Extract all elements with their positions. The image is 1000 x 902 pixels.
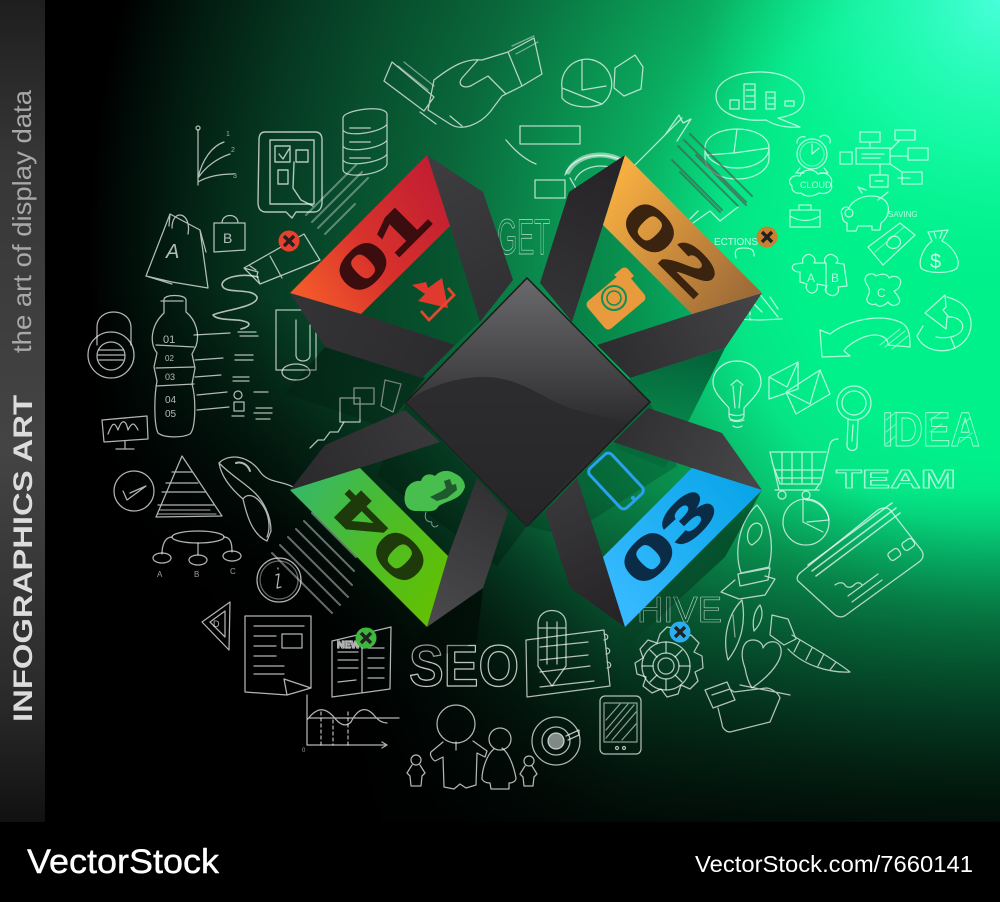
doodle: family figures <box>407 705 537 789</box>
doodle: necktie <box>770 615 850 672</box>
doodle: briefcase <box>790 205 820 227</box>
doodle: credit card <box>797 503 923 617</box>
doodle: alarm clock <box>796 135 830 173</box>
doodle: line graph: 0 <box>302 748 306 754</box>
doodle: shopping bag B <box>214 216 245 252</box>
doodle: shopping bag A <box>146 214 208 288</box>
doodle: letter C puzzle: C <box>877 286 886 300</box>
doodle: coffee cup <box>532 717 580 765</box>
doodle: curved arrow <box>820 318 910 357</box>
flap: upper dark fold <box>540 155 625 322</box>
doodle: handshake <box>384 36 542 127</box>
doodle: bottle with list: 02 <box>165 354 174 363</box>
doodle: TEAM lettering: TEAM <box>836 464 956 494</box>
icon: download into tray <box>412 278 454 320</box>
icon: smartphone <box>587 451 645 511</box>
doodle: smartphone <box>600 696 641 754</box>
doodle: squiggle <box>213 275 258 329</box>
doodle: org chart: B <box>194 570 199 579</box>
doodle: IDEA lettering: IDEA <box>882 404 980 457</box>
doodle: branching curves: 1 <box>226 131 230 138</box>
doodle: document <box>245 616 311 695</box>
doodle: chart under orange panel <box>705 292 782 320</box>
doodle: banknote <box>868 223 915 265</box>
doodle: small pie <box>783 499 829 545</box>
doodle: envelopes <box>769 362 830 414</box>
doodle: pencil <box>244 234 320 284</box>
doodle: bottle with list <box>152 296 272 437</box>
doodle: target arrow <box>506 115 691 198</box>
doodle: shopping bag A: A <box>165 241 179 263</box>
doodle: org chart: C <box>230 567 236 576</box>
badge: orange x <box>756 226 778 248</box>
panel: 03 <box>545 408 762 627</box>
footer url: VectorStock.com/7660141 <box>695 851 973 877</box>
flap: upper dark fold <box>427 155 513 322</box>
number 01: 01 <box>323 188 442 307</box>
doodle: piggy bank: SAVING <box>888 210 918 219</box>
doodle: letter C puzzle <box>865 274 901 306</box>
side strip <box>0 0 45 822</box>
doodle: mouse <box>219 457 293 541</box>
flap: left dark fold <box>290 293 455 378</box>
doodle: branching curves: 2 <box>231 147 235 154</box>
number 04: 04 <box>321 476 441 596</box>
flap: right dark fold <box>613 408 762 490</box>
badge: green x <box>356 628 376 648</box>
number 02: 02 <box>608 188 730 310</box>
doodle: tablet with hand <box>258 132 322 218</box>
band: blue label <box>603 468 762 627</box>
icon: camera <box>585 268 647 332</box>
inner shaded triangles <box>360 225 692 557</box>
doodle: triangle sign: D <box>213 619 220 629</box>
doodle: branching curves <box>196 126 237 185</box>
doodle: light bulb <box>713 361 761 428</box>
doodle: directions text and network <box>690 207 758 258</box>
panel: 01 <box>290 155 513 378</box>
doodle: puzzle pieces <box>792 254 847 296</box>
doodle: news page: NEWS <box>337 640 367 651</box>
badge: blue x <box>670 622 690 642</box>
doodle: shopping bag B: B <box>223 230 232 246</box>
footer bar <box>0 822 1000 902</box>
doodle: org chart <box>153 531 241 579</box>
doodle: folder with pen <box>705 682 790 732</box>
panel: 04 <box>290 410 508 627</box>
doodle: bottle with list: 01 <box>163 334 175 346</box>
doodle: directions text and network: ECTIONS <box>714 237 758 248</box>
doodle: presentation board <box>102 416 148 449</box>
panel: 02 <box>540 155 762 378</box>
doodle: puzzle pieces: A <box>807 271 815 285</box>
doodle: paperclip sheet <box>276 310 316 380</box>
doodle sketches <box>88 36 980 789</box>
doodle: money bag: $ <box>930 251 941 273</box>
doodle: notebook with pencil <box>526 610 611 697</box>
doodle: shopping cart <box>770 439 838 499</box>
doodle: diagonal text lines <box>272 505 356 613</box>
doodle: pie chart <box>562 55 643 107</box>
number 03: 03 <box>608 477 730 599</box>
long shadows behind the central figure <box>285 347 762 677</box>
doodle: bottle with list: 04 <box>165 395 177 406</box>
doodle: SEO lettering: SEO <box>409 634 519 699</box>
doodle: speech bubble with bars <box>716 72 804 127</box>
doodle: puzzle pieces: B <box>831 271 839 285</box>
flap: right dark fold <box>597 293 762 378</box>
doodle: padlock <box>88 312 134 378</box>
icon: cloud with person <box>404 471 465 527</box>
doodle: info circle <box>257 558 301 602</box>
doodle: circular arrow <box>917 295 971 351</box>
doodle: org chart: A <box>157 570 163 579</box>
badge: red x <box>278 230 300 252</box>
flap: left dark fold <box>290 410 440 490</box>
doodle: leaves and heart <box>726 600 781 688</box>
doodle: magnifier <box>837 386 871 450</box>
doodle: gray diagonal lines top right <box>672 134 752 212</box>
doodle: diagonal text lines top left <box>306 165 368 234</box>
doodle: ARCHIVE lettering: HIVE <box>637 589 722 630</box>
flap: lower dark fold <box>427 478 508 627</box>
doodle: pyramid <box>156 456 222 517</box>
doodle: triangle sign <box>202 602 230 650</box>
doodle: flowchart <box>840 130 928 187</box>
doodle: piggy bank <box>841 187 918 231</box>
doodle: BUDGET lettering: GET <box>497 209 550 265</box>
doodle: 3D pie <box>705 129 769 179</box>
footer logo: VectorStock <box>27 843 220 881</box>
center diamond <box>406 278 650 526</box>
doodle: database stack <box>343 109 387 175</box>
strip title: INFOGRAPHICS ART <box>8 394 38 722</box>
doodle: cloud: CLOUD <box>800 180 832 190</box>
doodle: branching curves: 3 <box>233 173 237 180</box>
doodle: rocket <box>721 505 775 599</box>
doodle: bottle with list: 03 <box>165 372 175 382</box>
flap: lower dark fold <box>545 478 625 627</box>
band: orange label <box>603 155 762 314</box>
doodle: stacked squares <box>310 380 401 448</box>
strip tagline: the art of display data <box>7 89 37 353</box>
doodle: gear <box>635 627 703 697</box>
doodle: cloud <box>790 170 832 196</box>
doodle: bottle with list: 05 <box>165 409 177 420</box>
doodle: check circle <box>114 471 154 511</box>
doodle: news page <box>332 627 391 697</box>
band: green label <box>290 468 448 627</box>
band: red label <box>290 155 450 314</box>
doodle: line graph <box>302 695 399 754</box>
doodle: money bag <box>920 230 958 273</box>
